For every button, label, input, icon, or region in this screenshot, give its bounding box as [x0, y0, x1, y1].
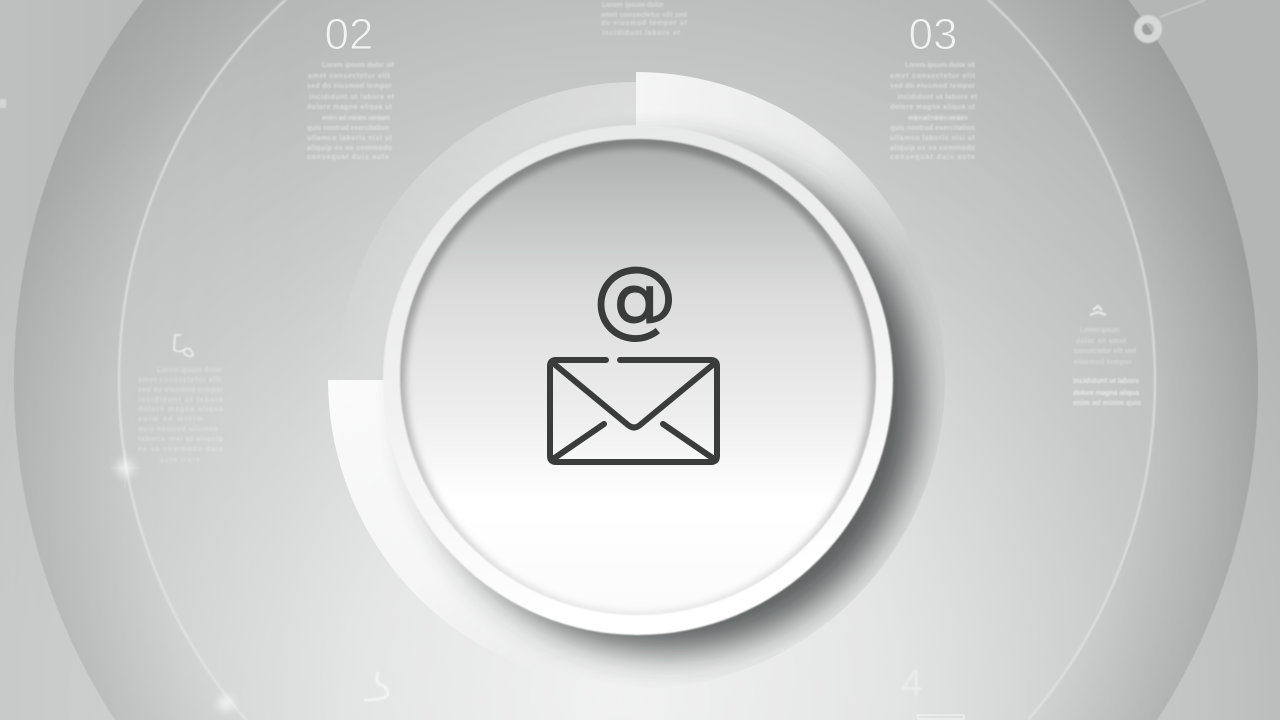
icon: right hand	[1090, 306, 1106, 315]
bright text right: incididunt ut labore	[1073, 378, 1139, 385]
text block left: amet consectetur elit	[138, 377, 222, 384]
dish	[406, 148, 870, 612]
bright text right	[1073, 378, 1141, 407]
segment top left	[338, 82, 636, 380]
top text block: amet consectetur elit sed	[601, 12, 687, 19]
text block 02: incididunt ut labore et	[309, 94, 395, 101]
node	[1138, 19, 1158, 39]
text block left: ex ea commodo duis	[138, 446, 223, 453]
number 03: 03	[909, 10, 957, 59]
icon: email	[550, 249, 717, 462]
bright text right: enim ad minim quis	[1073, 400, 1141, 407]
bottom left icon	[364, 672, 388, 700]
text block 03: ullamco laboris nisi ut	[890, 135, 976, 142]
text block 03: enim ad minim veniam	[908, 115, 968, 122]
right block	[1073, 306, 1141, 407]
text block 03: incididunt ut labore et	[897, 94, 978, 101]
text block right: consectetur elit sed	[1074, 348, 1136, 355]
text block left: quis nostrud ullamco	[138, 426, 218, 433]
text block 02: ullamco laboris nisi ut	[307, 135, 393, 142]
text block 03: sed do eiusmod tempor	[890, 83, 975, 90]
text block 03: aliquip ex ea commodo	[890, 145, 975, 152]
inner rim shade	[400, 139, 876, 615]
text block 03	[890, 62, 978, 161]
envelope	[550, 360, 717, 462]
top text block: do eiusmod tempor ut	[601, 20, 688, 27]
text block 02: enim ad minim veniam	[322, 115, 390, 122]
bottom right number 4: 4	[901, 663, 923, 705]
segment top right	[636, 72, 930, 380]
text block right: Lorem ipsum	[1080, 327, 1120, 334]
bottom right tag	[918, 715, 964, 719]
icon: left hand	[174, 335, 193, 356]
text block 03: amet consectetur elit	[890, 73, 976, 80]
small mark left edge	[0, 99, 6, 108]
text block left: dolore magna aliqua	[138, 406, 223, 413]
text block right	[1074, 327, 1136, 366]
text block 02: aliquip ex ea commodo	[307, 145, 392, 152]
node top right	[1138, 0, 1205, 39]
bright text right: dolore magna aliqua	[1073, 390, 1139, 397]
text block 02	[307, 62, 395, 161]
text block left: enim ad minim	[138, 416, 203, 423]
light flare left	[110, 450, 140, 488]
text block 02: dolore magna aliqua ut	[307, 104, 393, 111]
text block left: sed do eiusmod tempor	[138, 387, 223, 394]
left side light	[0, 0, 300, 720]
outer rim	[383, 125, 893, 635]
text block right: dolor sit amet	[1076, 338, 1127, 345]
text block right: eiusmod tempor	[1074, 359, 1132, 366]
segmented ring	[328, 72, 930, 678]
top text block: Lorem ipsum dolor	[602, 2, 664, 9]
connector line	[1160, 0, 1205, 17]
segment bottom left	[328, 380, 636, 678]
text block 02: quis nostrud exercitation	[307, 125, 389, 132]
text block 03: dolore magna aliqua ut	[890, 104, 976, 111]
top text block: incididunt labore et	[602, 30, 681, 37]
text block 02: amet consectetur elit	[308, 73, 391, 80]
text block 03: consequat duis aute	[890, 154, 975, 161]
drop shadow	[414, 148, 918, 652]
number 02: 02	[325, 10, 373, 59]
text block 03: Lorem ipsum dolor sit	[905, 62, 976, 69]
text block 03: quis nostrud exercitation	[890, 125, 975, 132]
text block left: laboris nisi ut aliquip	[138, 436, 223, 443]
left block	[138, 335, 223, 464]
circle button	[383, 125, 893, 635]
text block left	[138, 367, 223, 464]
label: 03	[890, 10, 978, 161]
top text block	[601, 2, 688, 37]
text block left: Lorem ipsum dolor	[157, 367, 222, 374]
at sign: @	[592, 249, 678, 348]
text block 02: sed do eiusmod tempor	[307, 83, 392, 90]
light flare bottom	[218, 695, 234, 711]
text block 02: consequat duis aute	[307, 154, 389, 161]
text block left: aute irure	[160, 457, 200, 464]
text block 02: Lorem ipsum dolor sit	[322, 62, 395, 69]
label: 02	[307, 10, 395, 161]
text block left: incididunt ut labore	[138, 397, 223, 404]
